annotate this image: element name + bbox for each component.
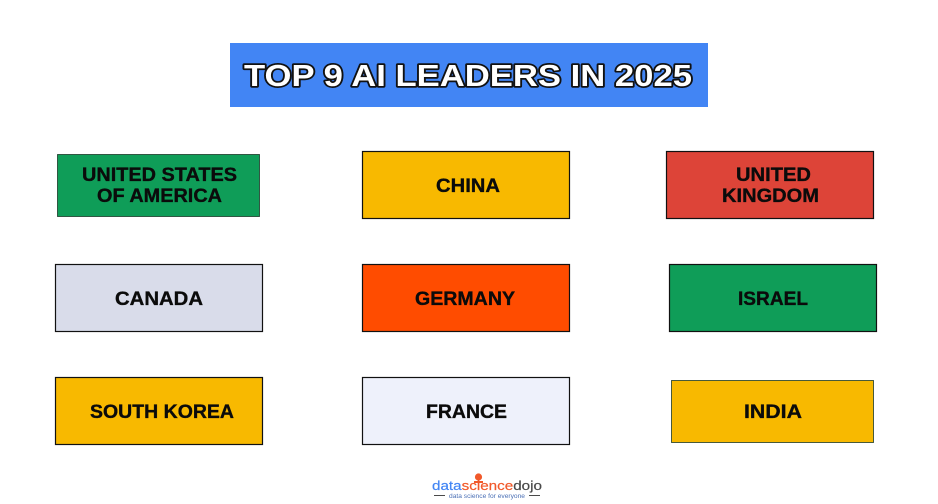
panel: United Kingdom: KINGDOM <box>722 186 819 207</box>
panel: United Kingdom <box>666 152 874 218</box>
panel: China: CHINA <box>436 176 500 197</box>
panel: United States of America: UNITED STATES <box>82 165 237 186</box>
panel: United States of America: OF AMERICA <box>97 186 222 207</box>
panel: Germany <box>362 264 570 332</box>
panel: Canada <box>56 264 262 332</box>
panel: Israel <box>670 264 876 332</box>
panel: Canada: CANADA <box>115 289 203 310</box>
panel: France <box>362 378 570 444</box>
panel: China <box>362 152 570 218</box>
panel: India <box>672 380 874 442</box>
title banner <box>230 43 708 107</box>
panel: United States of America <box>58 154 260 216</box>
panel: Germany: GERMANY <box>415 289 515 310</box>
logo tagline: data science for everyone <box>449 494 526 500</box>
panel: Israel: ISRAEL <box>738 289 808 310</box>
panel: South Korea <box>56 378 262 444</box>
logo: data science dojo <box>432 473 542 500</box>
panel: India: INDIA <box>744 402 802 423</box>
panel: France: FRANCE <box>426 402 507 423</box>
logo wordmark: data science dojo <box>432 478 542 493</box>
panel: South Korea: SOUTH KOREA <box>90 402 234 423</box>
icon: logo figure <box>474 473 483 483</box>
title banner: TOP 9 AI LEADERS IN 2025 <box>244 58 692 93</box>
panel: United Kingdom: UNITED <box>736 165 811 186</box>
